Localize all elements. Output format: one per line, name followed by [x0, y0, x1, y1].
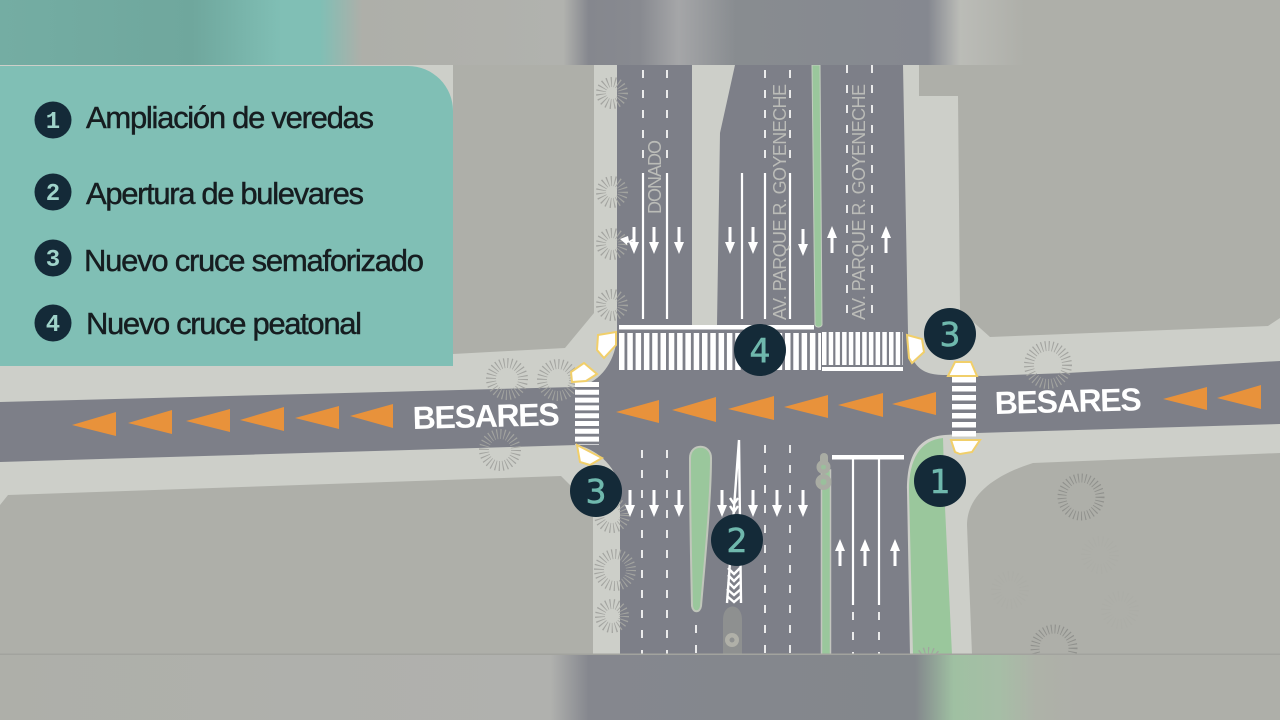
legend item 3: 3: [46, 247, 60, 274]
street label: Besares east: BESARES: [994, 381, 1142, 421]
map edge line: [0, 654, 1280, 655]
street label: Besares west: BESARES: [412, 396, 560, 436]
marker 2: [711, 514, 763, 566]
orange direction arrows west: [72, 404, 393, 436]
marker 2: 2: [726, 521, 748, 560]
orange direction arrows centre: [616, 392, 936, 423]
trees: [484, 82, 1134, 672]
blurred top band: [0, 0, 1280, 65]
lane arrows north: [620, 226, 891, 256]
blurred bottom band: [0, 655, 1280, 720]
legend item 4: Nuevo cruce peatonal: [86, 306, 362, 341]
sidewalk extension green area: [909, 438, 952, 655]
marker 4: 4: [750, 331, 770, 370]
lane markings: [642, 65, 904, 655]
street label: Donado: DONADO: [645, 140, 665, 214]
legend item 1: Ampliación de veredas: [86, 100, 374, 135]
north green median: [812, 65, 822, 327]
legend item 1: 1: [46, 109, 60, 136]
legend item 2: Apertura de bulevares: [86, 176, 364, 211]
marker 1: 1: [930, 462, 950, 501]
lane arrows south: [625, 490, 900, 566]
legend item 3: Nuevo cruce semaforizado: [84, 243, 424, 278]
east crosswalk: [952, 377, 976, 440]
panel: legend: [0, 66, 453, 366]
street label: Av. Parque R. Goyeneche north-bound: AV. PARQUE R. GOYENECHE: [849, 84, 869, 320]
street label: Av. Parque R. Goyeneche south-bound: AV. PARQUE R. GOYENECHE: [770, 84, 790, 320]
south narrow median: [816, 453, 832, 660]
marker 3 west: [570, 465, 622, 517]
pedestrian refuges: [571, 332, 980, 465]
south roundabout island: [723, 606, 742, 655]
orange direction arrows east: [1163, 385, 1261, 410]
north crosswalk: [619, 325, 903, 371]
marker 3 west: 3: [586, 472, 606, 511]
marker 3 east: [924, 308, 976, 360]
legend item 2: 2: [46, 181, 60, 208]
marker 4: [734, 324, 786, 376]
marker 3 east: 3: [940, 315, 960, 354]
legend item 4: 4: [46, 312, 60, 339]
marker 1: [914, 455, 966, 507]
chevron marking: [727, 440, 741, 603]
south boulevard median: [690, 447, 711, 611]
west crosswalk: [575, 382, 599, 445]
